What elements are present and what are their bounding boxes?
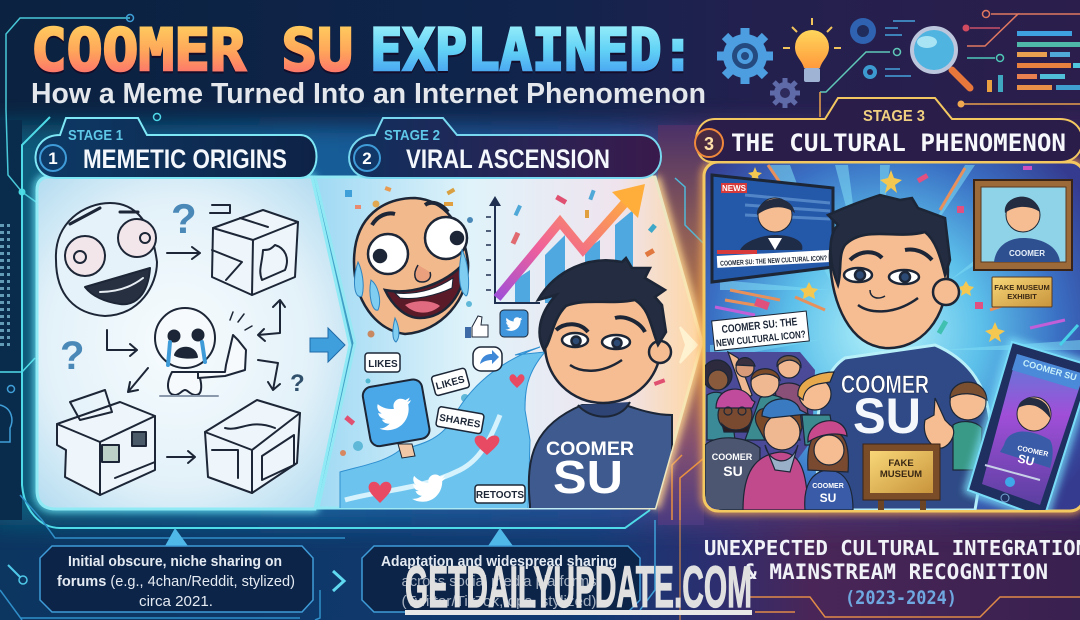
stage 1 tab [35, 118, 317, 178]
sketch arrows [107, 205, 285, 463]
framed portrait: COOMER [1009, 249, 1045, 258]
heading: the cultural phenomenon: THE CULTURAL PHENOMENON [731, 129, 1066, 157]
label: stage 3: STAGE 3 [863, 108, 925, 125]
panel: stage 1 memetic origins [37, 177, 350, 509]
man on right [950, 382, 987, 470]
pill: stage 1 header [35, 118, 317, 178]
crowd [702, 352, 987, 510]
description text: forums (e.g., 4chan/Reddit, stylized) [57, 573, 295, 590]
chart: growth [486, 184, 645, 303]
guy shirt: SU [553, 451, 623, 503]
description text: across social media platforms [402, 573, 596, 590]
dates: (2023-2024) [845, 587, 957, 609]
number badge 2: 2 [362, 149, 372, 168]
icon: gear large [717, 28, 773, 84]
top right tech icons [717, 10, 1080, 117]
bubble: likes [365, 353, 400, 372]
line 2: & MAINSTREAM RECOGNITION [744, 560, 1048, 584]
description text: (Twitter/TikTok, ops, stylized) [402, 593, 597, 610]
guy head [538, 258, 671, 403]
description box [362, 546, 640, 612]
phone: SU [1016, 451, 1036, 469]
sketch: box top right [212, 210, 298, 295]
panel: stage 2 viral ascension [315, 177, 702, 510]
sketch: troll face [56, 203, 157, 316]
subtitle: How a Meme Turned Into an Internet Phenomenon [31, 78, 706, 110]
back row [702, 352, 808, 440]
description text [57, 553, 295, 610]
stage 1 art panel [37, 177, 350, 509]
guy shirt: COOMER [546, 439, 634, 460]
number badge 1: 1 [48, 149, 58, 168]
plaque: fake museum [863, 444, 940, 512]
title: coomer su: COOMER SU [31, 16, 353, 84]
icon: twitter tile large [361, 378, 431, 448]
pointing hand [924, 398, 954, 448]
crowd backdrop [706, 352, 815, 510]
icon: white bird [412, 474, 446, 502]
pointer triangle [488, 528, 513, 546]
burst rays and confetti [710, 164, 1080, 352]
bubble: likes 2: LIKES [435, 374, 466, 393]
description text: Initial obscure, niche sharing on [68, 553, 282, 570]
sketch: box bottom left [57, 390, 155, 495]
stage 2 tab [349, 118, 661, 178]
sketch: crying character [155, 308, 252, 396]
pointer triangle [165, 528, 188, 546]
description: stage 3 [704, 536, 1080, 609]
tv news screen: COOMER SU: THE NEW CULTURAL ICON? [720, 255, 827, 268]
bubble: retoots: RETOOTS [476, 490, 524, 501]
question marks: ? [290, 370, 305, 397]
number badge 1 [40, 145, 66, 171]
icon: thumbs up [465, 316, 488, 338]
speech bubbles [365, 347, 525, 503]
heading: viral ascension: VIRAL ASCENSION [406, 144, 610, 174]
heading: memetic origins: MEMETIC ORIGINS [83, 144, 287, 174]
icon: gear small [770, 78, 800, 108]
bubble: share arrow [473, 347, 502, 371]
bubble: likes: LIKES [368, 359, 398, 370]
sign: new cultural icon: COOMER SU: THE [721, 316, 798, 336]
title [31, 16, 694, 84]
label: stage 2: STAGE 2 [384, 127, 440, 144]
label: stage 1: STAGE 1 [68, 127, 123, 144]
circuit traces [820, 10, 1080, 117]
stage 1 glow [37, 177, 350, 509]
shirt large: SU [853, 388, 921, 444]
stage 2 glow [655, 177, 702, 508]
watermark: GETDAILYUPDATE.COM [405, 555, 752, 620]
question marks [60, 195, 305, 397]
tv news screen: NEWS [722, 184, 747, 193]
icon: hearts [369, 374, 525, 503]
plaque: fake museum: FAKE [888, 458, 914, 469]
pill: stage 3 header [695, 98, 1080, 162]
question marks: ? [171, 195, 197, 242]
head large [828, 195, 959, 348]
description text: circa 2021. [139, 593, 213, 610]
description box [40, 546, 313, 612]
chevron divider [680, 327, 697, 363]
title: explained: EXPLAINED: [370, 16, 694, 84]
plaque: fake museum exhibit [992, 277, 1052, 307]
line 1: UNEXPECTED CULTURAL INTEGRATION [704, 536, 1080, 560]
girl in beanie: SU [820, 491, 836, 505]
icon: twitter tile small [500, 310, 528, 337]
bubble: likes 2 [431, 368, 470, 396]
plaque: fake museum: MUSEUM [880, 469, 922, 480]
icon: blue arrow [310, 328, 345, 362]
plaque: fake museum exhibit: EXHIBIT [1007, 292, 1037, 301]
pill: stage 2 header [349, 118, 661, 178]
stage 3 tab [696, 98, 1080, 162]
tv news screen [712, 175, 833, 282]
phone [968, 342, 1080, 518]
man in blue cap [743, 399, 808, 510]
number badge 2 [354, 145, 380, 171]
phone: COOMER SU [1022, 358, 1078, 383]
number badge 3: 3 [704, 134, 714, 154]
watermark [405, 555, 752, 620]
man in pink cap: SU [723, 463, 743, 479]
girl in beanie [805, 421, 853, 510]
shirt large [817, 345, 990, 510]
circuit lines [0, 14, 704, 620]
icon: light bulb [783, 18, 841, 82]
shirt large: COOMER [841, 371, 929, 399]
meme face [354, 198, 468, 334]
description: stage 2 [362, 528, 640, 612]
confetti [340, 186, 665, 456]
girl in beanie: COOMER [812, 483, 844, 490]
icon: small blue gears and lines [850, 18, 915, 79]
sketch: box bottom right [205, 400, 300, 493]
number badge 3 [695, 129, 723, 157]
sign: new cultural icon [712, 311, 809, 351]
circuit lines bottom right [750, 597, 1080, 617]
man in pink cap [705, 389, 760, 510]
bubble: retoots [475, 485, 525, 503]
framed portrait [974, 180, 1072, 270]
icon: chevron between descriptions [333, 571, 344, 591]
panel: stage 3 the cultural phenomenon [702, 162, 1080, 518]
bubble: shares [436, 406, 484, 434]
blond man [798, 372, 835, 445]
water drips [355, 250, 469, 342]
description text [381, 553, 617, 610]
sign: new cultural icon: NEW CULTURAL ICON? [716, 329, 806, 350]
plaque: fake museum exhibit: FAKE MUSEUM [994, 283, 1050, 292]
stage 3 glow [704, 162, 1080, 511]
man in pink cap: COOMER [712, 452, 753, 462]
phone: COOMER [1017, 445, 1049, 459]
description text: Adaptation and widespread sharing [381, 553, 617, 570]
stage 3 art panel [704, 162, 1080, 511]
question marks: ? [60, 334, 84, 378]
icon: code bars [987, 31, 1080, 92]
stage 2 art panel [315, 177, 702, 508]
description: stage 1 [40, 528, 313, 612]
water splash [340, 347, 545, 510]
icon: magnifier [912, 28, 970, 88]
meme sketches [56, 203, 300, 495]
bubble: shares: SHARES [438, 413, 482, 431]
guy shirt [529, 402, 672, 510]
